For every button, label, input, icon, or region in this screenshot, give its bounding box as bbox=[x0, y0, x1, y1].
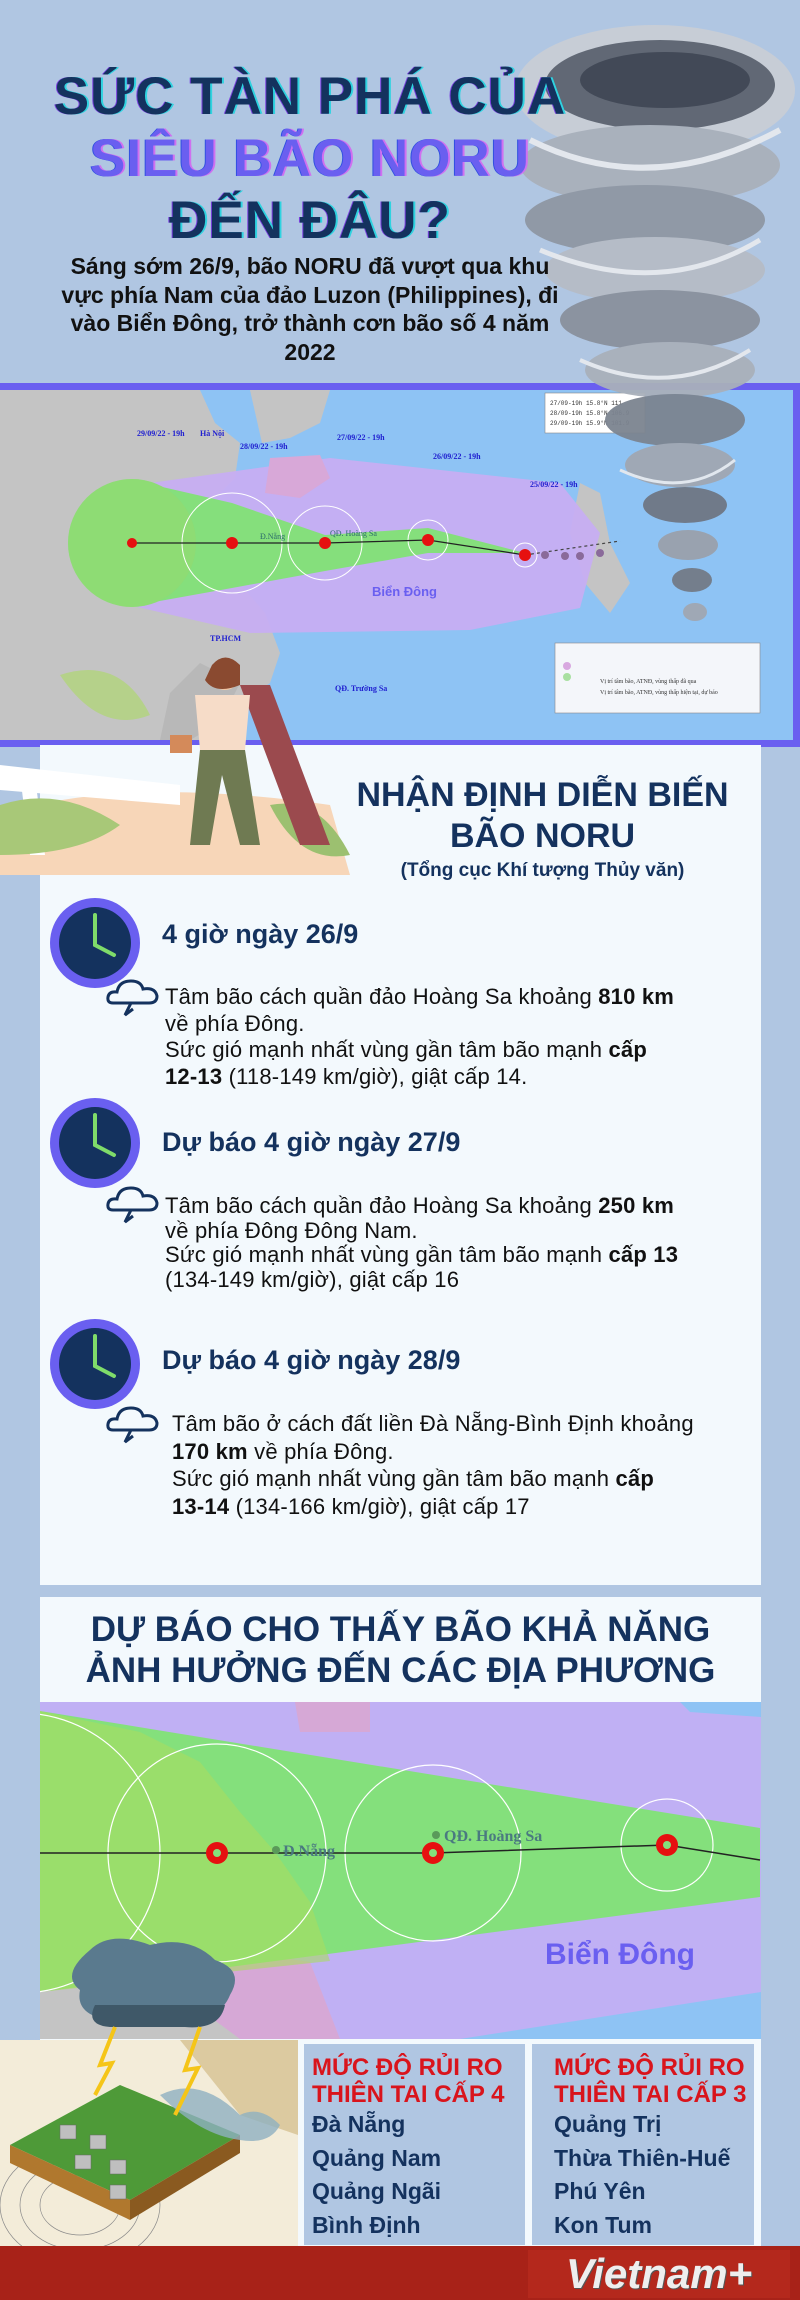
subtitle: 2022 bbox=[284, 338, 336, 364]
heading: forecast impact bbox=[86, 1610, 715, 1690]
text block bbox=[165, 984, 674, 1088]
panel: storm development bbox=[40, 745, 761, 1585]
text block: về phía Đông. bbox=[165, 1010, 305, 1036]
title: SIÊU BÃO NORU bbox=[90, 129, 530, 188]
map 1: storm track: 28/09-19h 15.8°N 106.9 bbox=[550, 410, 630, 417]
title bbox=[54, 66, 566, 250]
box: risk level 4: THIÊN TAI CẤP 4 bbox=[312, 2081, 504, 2108]
item 2 bbox=[50, 1098, 678, 1292]
text block: Sức gió mạnh nhất vùng gần tâm bão mạnh cấp 13 bbox=[165, 1242, 678, 1267]
item 3 bbox=[50, 1319, 694, 1518]
heading: NHẬN ĐỊNH DIỄN BIẾN bbox=[356, 775, 729, 855]
icon: cloud bbox=[106, 1186, 158, 1224]
map 1: storm track: Đ.Nẵng bbox=[260, 532, 285, 541]
subheading: source: (Tổng cục Khí tượng Thủy văn) bbox=[401, 860, 684, 881]
map 2: zoomed track: Đ.Nẵng bbox=[283, 1843, 335, 1860]
box: risk level 3: Phú Yên bbox=[554, 2178, 646, 2204]
map 1: storm track: QĐ. Trường Sa bbox=[335, 684, 387, 693]
map 1: storm track: TP.HCM bbox=[210, 634, 241, 643]
icon: cloud bbox=[106, 1406, 158, 1444]
map 1: storm track bbox=[0, 383, 800, 747]
text block: 12-13 (118-149 km/giờ), giật cấp 14. bbox=[165, 1064, 527, 1088]
subtitle: Sáng sớm 26/9, bão NORU đã vượt qua khu bbox=[71, 253, 549, 279]
text block: về phía Đông Đông Nam. bbox=[165, 1218, 418, 1242]
title: ĐẾN ĐÂU? bbox=[169, 191, 451, 250]
map 2: zoomed track: QĐ. Hoàng Sa bbox=[444, 1828, 542, 1845]
icon: clock bbox=[50, 1319, 140, 1409]
map 1: storm track: 29/09-19h 15.9°N 101.9 bbox=[550, 420, 630, 427]
text block: Tâm bão cách quần đảo Hoàng Sa khoảng 250 km bbox=[165, 1193, 674, 1218]
box: risk level 4: Bình Định bbox=[312, 2212, 421, 2238]
box: risk level 4: MỨC ĐỘ RỦI RO bbox=[312, 2054, 503, 2081]
map 1: storm track: 27/09/22 - 19h bbox=[337, 433, 385, 442]
text block: Sức gió mạnh nhất vùng gần tâm bão mạnh cấp bbox=[165, 1037, 647, 1062]
box: risk level 4: Quảng Ngãi bbox=[312, 2178, 441, 2204]
text block: (134-149 km/giờ), giật cấp 16 bbox=[165, 1266, 459, 1292]
box: risk level 4 bbox=[304, 2044, 525, 2245]
subtitle bbox=[61, 253, 559, 364]
heading: Dự báo 4 giờ ngày 28/9: Dự báo 4 giờ ngày 28/9 bbox=[162, 1345, 460, 1375]
map 1: storm track: 28/09/22 - 19h bbox=[240, 442, 288, 451]
map 2: zoomed track: Biển Đông bbox=[545, 1938, 695, 1971]
box: risk level 3 bbox=[532, 2044, 754, 2245]
box: risk level 4: Quảng Nam bbox=[312, 2144, 441, 2170]
map 1: storm track: Biển Đông bbox=[372, 584, 437, 599]
box: risk level 4: Đà Nẵng bbox=[312, 2111, 405, 2137]
text block: Sức gió mạnh nhất vùng gần tâm bão mạnh cấp bbox=[172, 1466, 654, 1491]
icon: clock bbox=[50, 1098, 140, 1188]
tornado illustration bbox=[518, 25, 795, 621]
icon: cloud bbox=[106, 980, 158, 1016]
map 2: zoomed track bbox=[40, 1702, 761, 2039]
heading: forecast impact: ẢNH HƯỞNG ĐẾN CÁC ĐỊA PHƯƠNG bbox=[86, 1651, 715, 1690]
item 1 bbox=[50, 898, 674, 1088]
footer: Vietnam+ logo bbox=[0, 2246, 800, 2300]
box: risk level 3: Kon Tum bbox=[554, 2212, 652, 2238]
box: risk level 3: THIÊN TAI CẤP 3 bbox=[554, 2081, 746, 2108]
map 1: storm track: Vị trí tâm bão, ATNĐ, vùng thấp đã qua bbox=[600, 678, 697, 685]
heading: NHẬN ĐỊNH DIỄN BIẾN: BÃO NORU bbox=[450, 817, 635, 855]
subtitle: vực phía Nam của đảo Luzon (Philippines), đi bbox=[61, 282, 559, 308]
box: risk level 3: MỨC ĐỘ RỦI RO bbox=[554, 2054, 745, 2081]
box: risk level 3: Thừa Thiên-Huế bbox=[554, 2144, 730, 2170]
map 1: storm track: 27/09-19h 15.8°N 111 bbox=[550, 400, 622, 407]
icon: clock bbox=[50, 898, 140, 988]
map 1: storm track: QĐ. Hoàng Sa bbox=[330, 529, 377, 538]
text block: 13-14 (134-166 km/giờ), giật cấp 17 bbox=[172, 1494, 530, 1518]
map 1: storm track: Vị trí tâm bão, ATNĐ, vùng thấp hiện tại, dự báo bbox=[600, 689, 718, 696]
text block bbox=[172, 1411, 694, 1518]
heading: Dự báo 4 giờ ngày 27/9: Dự báo 4 giờ ngày 27/9 bbox=[162, 1127, 460, 1157]
text block: 170 km về phía Đông. bbox=[172, 1438, 394, 1464]
panel: affected localities bbox=[40, 1597, 761, 2247]
text block: Tâm bão cách quần đảo Hoàng Sa khoảng 810 km bbox=[165, 984, 674, 1009]
illustration: storm over city bbox=[0, 1938, 298, 2246]
text block bbox=[165, 1193, 678, 1292]
map 1: storm track: 29/09/22 - 19h bbox=[137, 429, 185, 438]
footer: Vietnam+ logo: Vietnam+ bbox=[566, 2250, 752, 2297]
heading: forecast impact: DỰ BÁO CHO THẤY BÃO KHẢ NĂNG bbox=[91, 1610, 710, 1649]
map 1: storm track: 26/09/22 - 19h bbox=[433, 452, 481, 461]
box: risk level 3: Quảng Trị bbox=[554, 2111, 661, 2137]
text block: Tâm bão ở cách đất liền Đà Nẵng-Bình Định khoảng bbox=[172, 1411, 694, 1436]
subtitle: vào Biển Đông, trở thành cơn bão số 4 năm bbox=[71, 310, 549, 336]
map 1: storm track: 25/09/22 - 19h bbox=[530, 480, 578, 489]
title: SỨC TÀN PHÁ CỦA bbox=[54, 67, 566, 126]
heading: NHẬN ĐỊNH DIỄN BIẾN: NHẬN ĐỊNH DIỄN BIẾN bbox=[356, 776, 729, 814]
map 1: storm track: Hà Nội bbox=[200, 429, 225, 438]
heading: 4 giờ ngày 26/9: 4 giờ ngày 26/9 bbox=[162, 919, 358, 949]
illustration: woman in wind bbox=[0, 658, 350, 875]
